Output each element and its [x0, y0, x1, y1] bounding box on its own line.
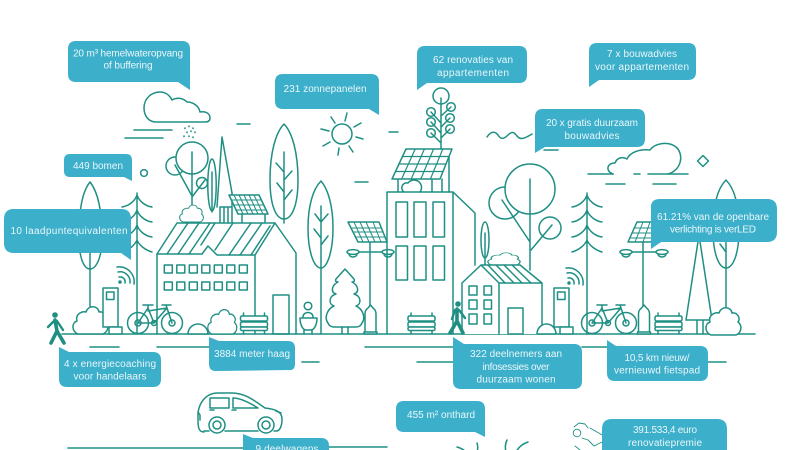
cloud with rain — [125, 92, 250, 138]
pedestrian left — [48, 312, 64, 343]
callout: gratis bouwadvies: 20 x gratis duurzaam — [546, 118, 638, 129]
right ground objects — [537, 193, 636, 334]
callout: bouwadvies appartementen: voor appartementen — [595, 62, 689, 73]
callout: gratis bouwadvies — [535, 109, 645, 153]
tree: tall left of sun — [270, 124, 298, 223]
planter — [300, 302, 317, 334]
callout: infosessies — [453, 337, 582, 389]
callout: bouwadvies appartementen — [589, 43, 696, 87]
plant at bottom — [457, 440, 528, 450]
callout: onthard — [396, 401, 485, 437]
callout: verLED: 61.21% van de openbare — [657, 212, 769, 223]
house 1 — [157, 223, 296, 334]
tree: ellipse mid — [308, 181, 333, 334]
tree: left tall — [79, 182, 102, 310]
hand with plant — [573, 423, 604, 450]
round trees behind house — [166, 137, 232, 222]
callout: fietspad: 10,5 km nieuw/ — [624, 353, 690, 364]
callout: energiecoaching — [59, 347, 161, 387]
callout: infosessies: infosessies over — [482, 362, 550, 373]
callout: hemelwateropvang: 20 m³ hemelwateropvang — [73, 48, 183, 60]
callout: bomen: 449 bomen — [73, 161, 123, 172]
road dashes — [68, 347, 726, 448]
callout: laadpunten — [4, 209, 131, 260]
plant on tower — [427, 88, 455, 149]
callout: haag: 3884 meter haag — [214, 349, 290, 360]
solar panel on house — [229, 195, 268, 222]
stylized pine — [326, 269, 364, 334]
callout: hemelwateropvang: of buffering — [104, 60, 152, 72]
street lamp right — [620, 222, 682, 334]
callout: renovaties: 62 renovaties van — [433, 55, 513, 66]
big round tree right — [481, 164, 561, 270]
callout: energiecoaching: voor handelaars — [74, 372, 146, 382]
wave and cloud right — [487, 132, 708, 184]
callout: gratis bouwadvies: bouwadvies — [564, 131, 620, 142]
trees far right — [686, 180, 741, 335]
callout: bouwadvies appartementen: 7 x bouwadvies — [607, 49, 677, 60]
street lamp — [347, 222, 394, 334]
callout: renovaties: appartementen — [437, 68, 509, 79]
callout: zonnepanelen — [275, 74, 379, 115]
callout: verLED: verlichting is verLED — [670, 224, 756, 236]
callout: zonnepanelen: 231 zonnepanelen — [284, 84, 366, 95]
callout: haag — [209, 337, 295, 371]
callout: infosessies: 322 deelnemers aan — [470, 349, 562, 360]
callout: deelwagens — [243, 434, 329, 450]
callout: renovatiepremie: renovatiepremie — [628, 438, 702, 449]
callout: renovatiepremie: 391.533,4 euro — [633, 425, 697, 436]
callout: fietspad — [607, 340, 708, 381]
callout: infosessies: duurzaam wonen — [476, 374, 556, 386]
pedestrian right — [450, 301, 465, 333]
sun — [321, 113, 398, 182]
callout: verLED — [651, 199, 777, 249]
ground line — [62, 333, 755, 335]
callout: bomen — [64, 154, 132, 181]
callout: laadpunten: 10 laadpuntequivalenten — [10, 226, 128, 237]
callout: renovaties — [417, 46, 527, 90]
small circle — [141, 170, 147, 176]
tower building — [387, 149, 475, 334]
car — [198, 393, 282, 433]
callout: energiecoaching: 4 x energiecoaching — [64, 359, 156, 370]
callout: renovatiepremie — [602, 419, 727, 450]
callout: fietspad: vernieuwd fietspad — [614, 366, 700, 376]
left ground objects — [73, 267, 267, 334]
scene: city illustration — [62, 88, 755, 450]
callout: onthard: 455 m² onthard — [407, 410, 475, 421]
callout: hemelwateropvang — [68, 41, 190, 90]
house 2 — [462, 265, 542, 334]
pine left — [122, 193, 152, 334]
